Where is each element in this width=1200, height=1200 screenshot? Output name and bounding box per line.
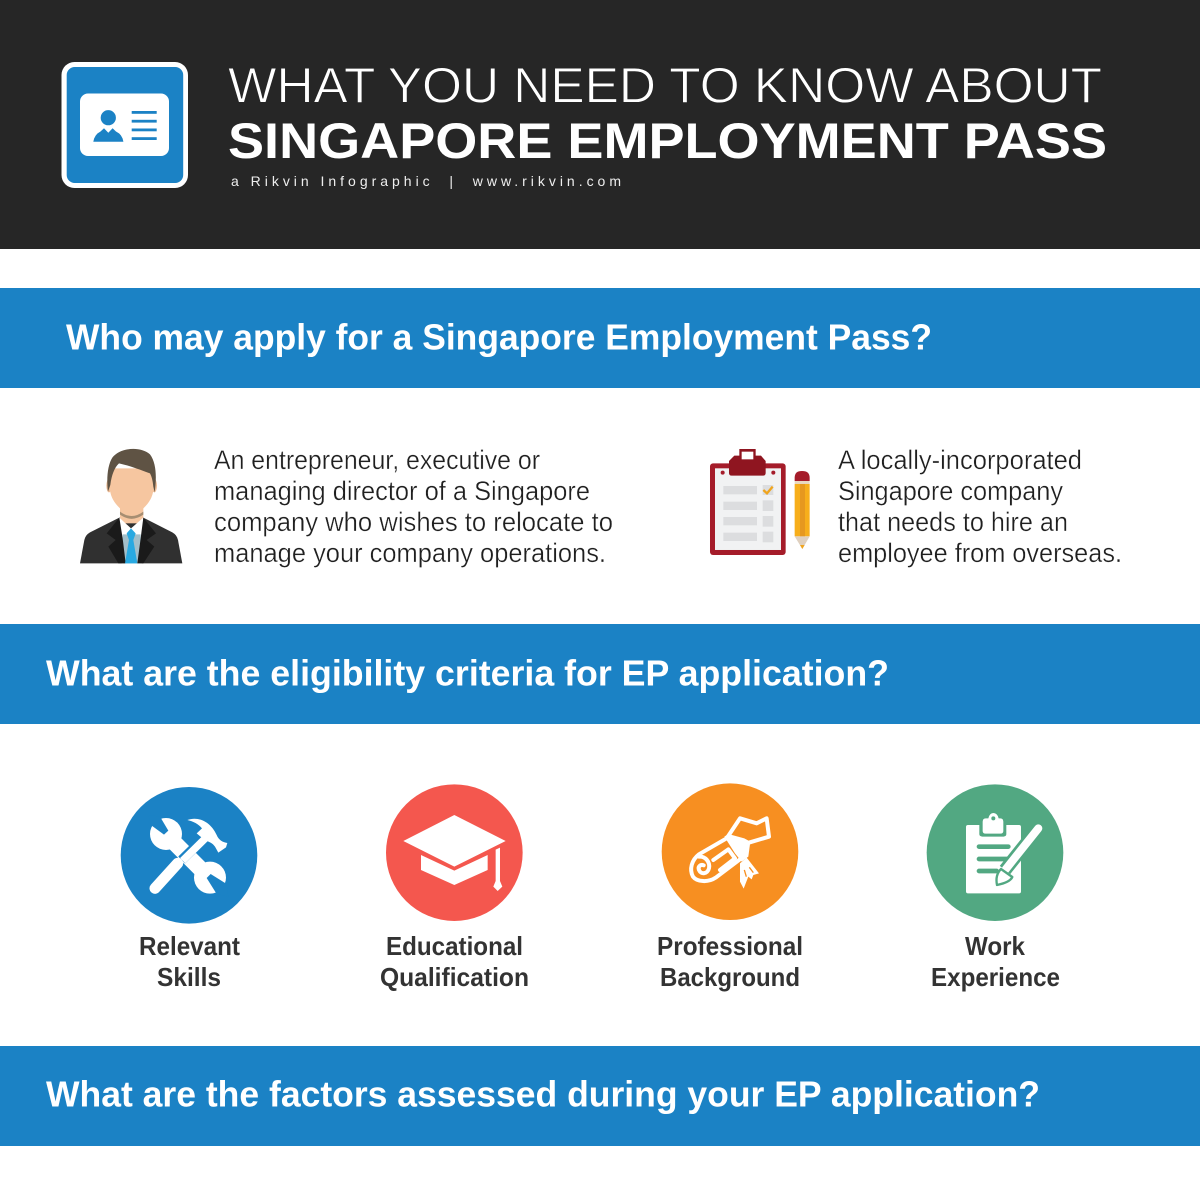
text block: entrepreneur: manage your company operations. [214,538,606,568]
text block: company: A locally-incorporated [838,445,1082,475]
subtitle: a Rikvin Infographic | www.rikvin.com [231,173,621,189]
title: WHAT YOU NEED TO KNOW ABOUT [228,58,1102,114]
section heading band: eligibility criteria: What are the eligibility criteria for EP application? [46,652,889,694]
text block: company: Singapore company [838,476,1063,506]
title: SINGAPORE EMPLOYMENT PASS [228,113,1107,169]
text block: entrepreneur: company who wishes to relocate to [214,507,613,537]
label: work experience: Work [965,931,1026,961]
label: relevant skills [139,931,240,992]
label: professional background [657,931,803,992]
title [228,58,1107,169]
section heading band: who may apply: Who may apply for a Singapore Employment Pass? [66,316,932,358]
label: relevant skills: Skills [157,962,221,992]
text block: company: that needs to hire an [838,507,1068,537]
icon: ID card [62,62,188,188]
label: professional background: Professional [657,931,803,961]
icon: diploma on orange circle [662,783,798,920]
section heading band: factors assessed: What are the factors assessed during your EP application? [46,1074,1040,1114]
text block: entrepreneur: An entrepreneur, executive or [214,445,540,475]
icon: clipboard on green circle [927,784,1063,921]
label: relevant skills: Relevant [139,931,240,961]
label: educational qualification: Educational [386,931,523,961]
icon: graduation cap on red circle [386,784,523,921]
section heading band: who may apply [0,288,1200,388]
section heading band: eligibility criteria [0,624,1200,724]
icon: tools on blue circle [121,787,257,924]
text block: company [838,445,1122,568]
text block: entrepreneur [214,445,613,568]
header banner [0,0,1200,249]
label: educational qualification [380,931,529,992]
text block: entrepreneur: managing director of a Singapore [214,476,590,506]
section heading band: factors assessed [0,1046,1200,1146]
label: work experience [931,931,1060,992]
icon: businessman [80,449,182,563]
label: educational qualification: Qualification [380,962,529,992]
label: work experience: Experience [931,962,1060,992]
label: professional background: Background [660,962,800,992]
text block: company: employee from overseas. [838,538,1122,568]
icon: clipboard and pencil [710,449,810,555]
